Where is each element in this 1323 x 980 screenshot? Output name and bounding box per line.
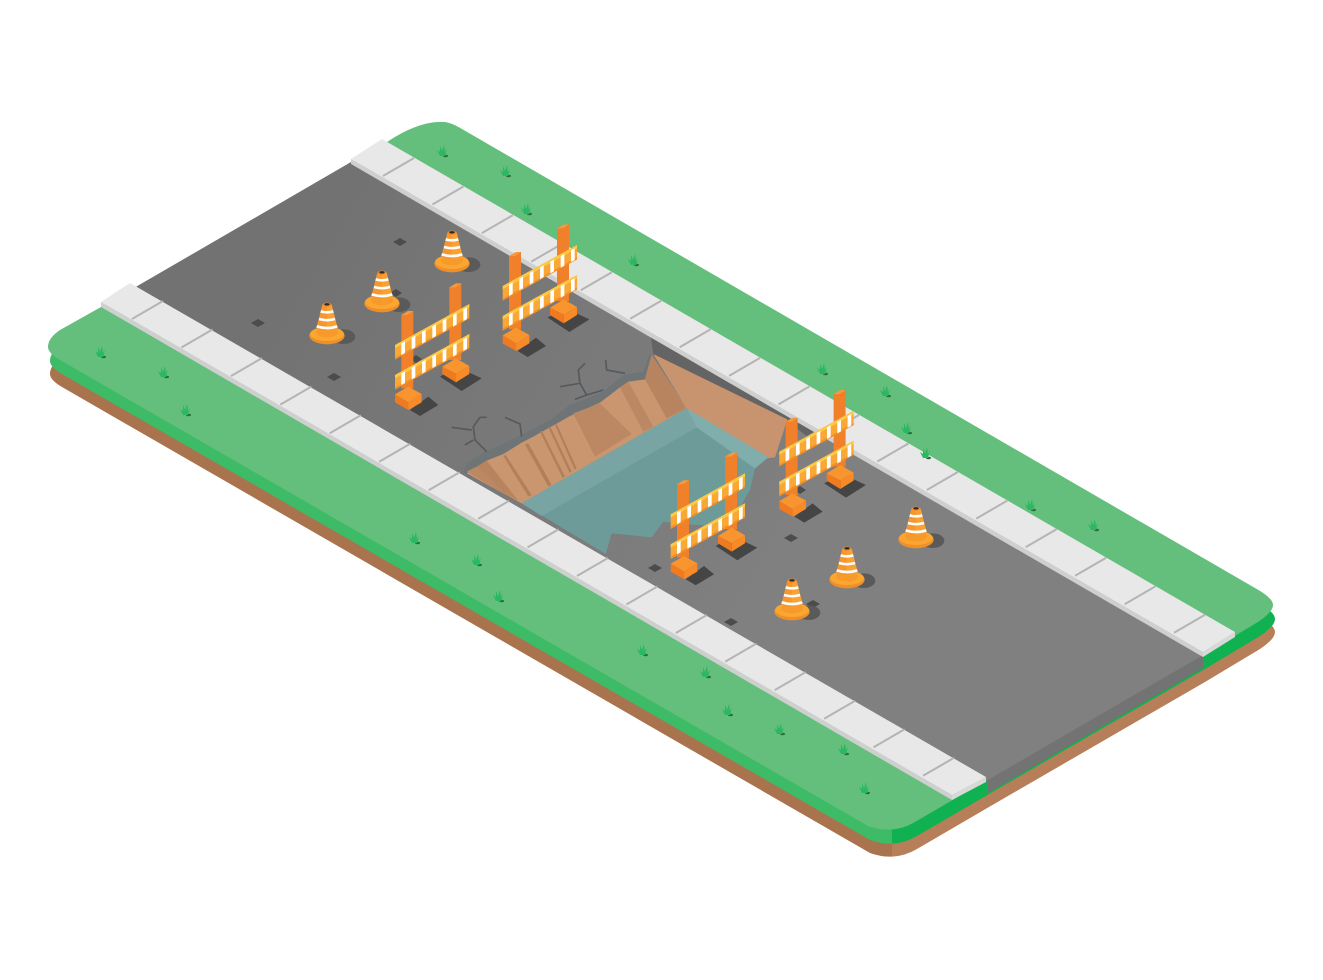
traffic cone 2 (364, 271, 410, 312)
grass side layer (50, 354, 1275, 844)
traffic cone 1 (434, 231, 480, 272)
grass tufts (95, 145, 1099, 794)
traffic cone 5 (829, 547, 875, 588)
back wall of the hole (653, 354, 787, 458)
barricade right front (671, 453, 757, 585)
barricade upper left back (503, 224, 589, 357)
floodwater (522, 408, 768, 554)
upper kerb (351, 139, 1235, 657)
left wall of the hole (467, 355, 687, 503)
soil layer (50, 366, 1275, 857)
traffic cone 3 (309, 303, 355, 344)
traffic cone 6 (774, 579, 820, 620)
lower kerb (101, 283, 986, 800)
broken road rim (463, 353, 660, 478)
road front edge (988, 655, 1203, 793)
sinkhole (452, 335, 817, 554)
traffic cone 4 (898, 507, 944, 548)
illustration: isometric road section with flooded sinkhole (48, 122, 1275, 857)
barricade right back (779, 390, 866, 523)
grass top surface (48, 122, 1273, 830)
pavement cracks (452, 360, 625, 452)
road surface (134, 162, 1203, 781)
barricade upper left front (395, 283, 482, 416)
road debris squares (251, 238, 820, 626)
shaded pavement strip under upper kerb (651, 335, 817, 436)
